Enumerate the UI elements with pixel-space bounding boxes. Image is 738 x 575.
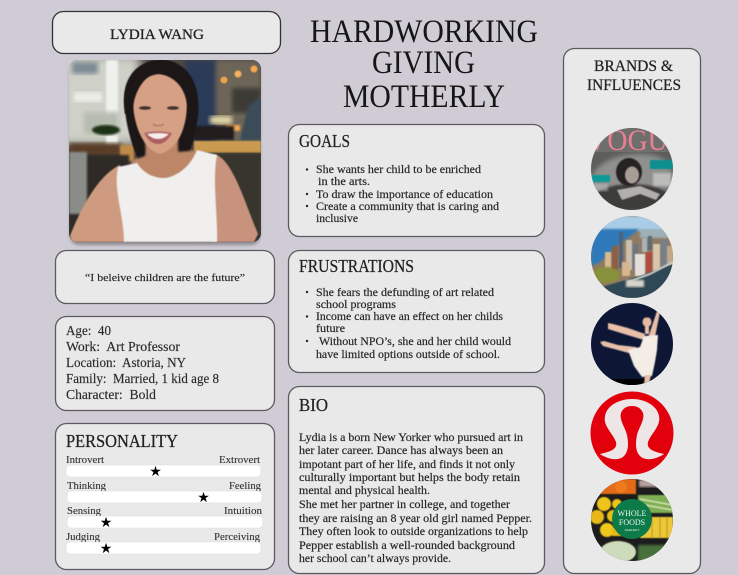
goals list: She wants her child to be enriched [316, 164, 481, 176]
photo: portrait of Lydia [60, 55, 261, 245]
panel: name [52, 12, 280, 54]
panel: bio [288, 386, 544, 574]
bio text: She met her partner in college, and together [299, 499, 510, 511]
slider: thinking to feeling: Feeling [229, 481, 262, 492]
name text: LYDIA WANG [110, 27, 204, 43]
demographics text [66, 323, 219, 402]
frustrations list: Income can have an effect on her childs [316, 311, 504, 323]
panel: demographics [56, 316, 274, 410]
personality heading: PERSONALITY [66, 431, 178, 451]
arms [70, 165, 126, 242]
goals list: inclusive [316, 213, 358, 225]
slider: thinking to feeling [67, 481, 262, 506]
icon: lululemon logo [590, 392, 674, 474]
frustrations list: She fears the defunding of art related [316, 287, 494, 299]
slider: introvert to extrovert [66, 455, 261, 480]
neck and chest [130, 138, 200, 182]
slider: judging to perceiving [66, 532, 261, 557]
slider: thinking to feeling: Thinking [67, 481, 107, 492]
frustrations list [306, 287, 511, 361]
title [310, 14, 538, 115]
hair back [124, 60, 198, 165]
demographics text: Family: Married, 1 kid age 8 [66, 371, 219, 386]
slider: judging to perceiving: ★ [100, 541, 112, 557]
icon: ballet dancer [591, 303, 673, 385]
icon: New York skyline [591, 216, 673, 298]
slider: judging to perceiving: Perceiving [214, 532, 261, 543]
slider: sensing to intuition: Intuition [224, 506, 263, 517]
icon: Vogue cover [591, 128, 673, 210]
brands heading: INFLUENCES [587, 77, 681, 94]
bio heading: BIO [299, 395, 328, 415]
brands heading [587, 58, 681, 94]
title: MOTHERLY [343, 79, 505, 115]
goals list: in the arts. [318, 176, 370, 188]
bio text: impotant part of her life, and finds it not only [299, 459, 515, 471]
icon: Whole Foods [590, 479, 673, 563]
slider: sensing to intuition [67, 506, 263, 531]
slider: thinking to feeling: ★ [197, 490, 210, 506]
slider: introvert to extrovert: Extrovert [219, 455, 260, 466]
frustrations list: have limited options outside of school. [316, 349, 500, 361]
bio text: her later career. Dance has always been an [299, 445, 503, 457]
smile [144, 132, 172, 144]
demographics text: Work: Art Professor [66, 339, 181, 354]
goals heading: GOALS [299, 131, 350, 151]
quote text: “I beleive children are the future” [85, 273, 245, 284]
slider: sensing to intuition: Sensing [67, 506, 102, 517]
panel: brands and influences [564, 48, 700, 574]
slider: introvert to extrovert: Introvert [66, 455, 104, 466]
bio text: Pepper establish a well-rounded background [299, 540, 515, 552]
whole foods logo text: MARKET [625, 528, 640, 532]
panel: quote [56, 250, 274, 304]
frustrations list: school programs [316, 299, 397, 311]
slider: judging to perceiving: Judging [66, 532, 101, 543]
bio text: they are raising an 8 year old girl named Pepper. [299, 513, 532, 525]
whole foods logo text: WHOLE [618, 509, 647, 518]
fringe [123, 60, 160, 115]
icon: Vogue cover: VOGUE [587, 124, 685, 157]
bio text: mental and physical health. [299, 485, 430, 497]
sleeveless top [117, 150, 217, 242]
bio text [299, 432, 532, 565]
frustrations list: future [316, 323, 345, 335]
face [133, 74, 187, 154]
panel: goals [288, 124, 544, 236]
panel: personality [56, 424, 274, 570]
whole foods logo text: FOODS [619, 518, 645, 527]
bio text: her school can’t always provide. [299, 553, 451, 565]
demographics text: Age: 40 [66, 323, 111, 338]
demographics text: Character: Bold [66, 387, 156, 402]
whole foods logo text [618, 510, 646, 531]
title: GIVING [372, 45, 475, 81]
eyes [139, 106, 151, 110]
bio text: culturally important but helps the body retain [299, 472, 520, 484]
window and room backdrop [60, 55, 140, 145]
demographics text: Location: Astoria, NY [66, 355, 186, 370]
slider: sensing to intuition: ★ [100, 515, 112, 531]
bio text: They often look to outside organizations to help [299, 526, 528, 538]
goals list [306, 164, 499, 225]
brands heading: BRANDS & [594, 58, 674, 75]
panel: frustrations [288, 250, 544, 372]
title: HARDWORKING [310, 14, 538, 50]
frustrations heading: FRUSTRATIONS [299, 256, 414, 276]
frustrations list: Without NPO’s, she and her child would [319, 336, 511, 348]
goals list: To draw the importance of education [316, 189, 493, 201]
goals list: Create a community that is caring and [316, 201, 499, 213]
slider: introvert to extrovert: ★ [149, 464, 162, 480]
bio text: Lydia is a born New Yorker who pursued art in [299, 432, 523, 444]
